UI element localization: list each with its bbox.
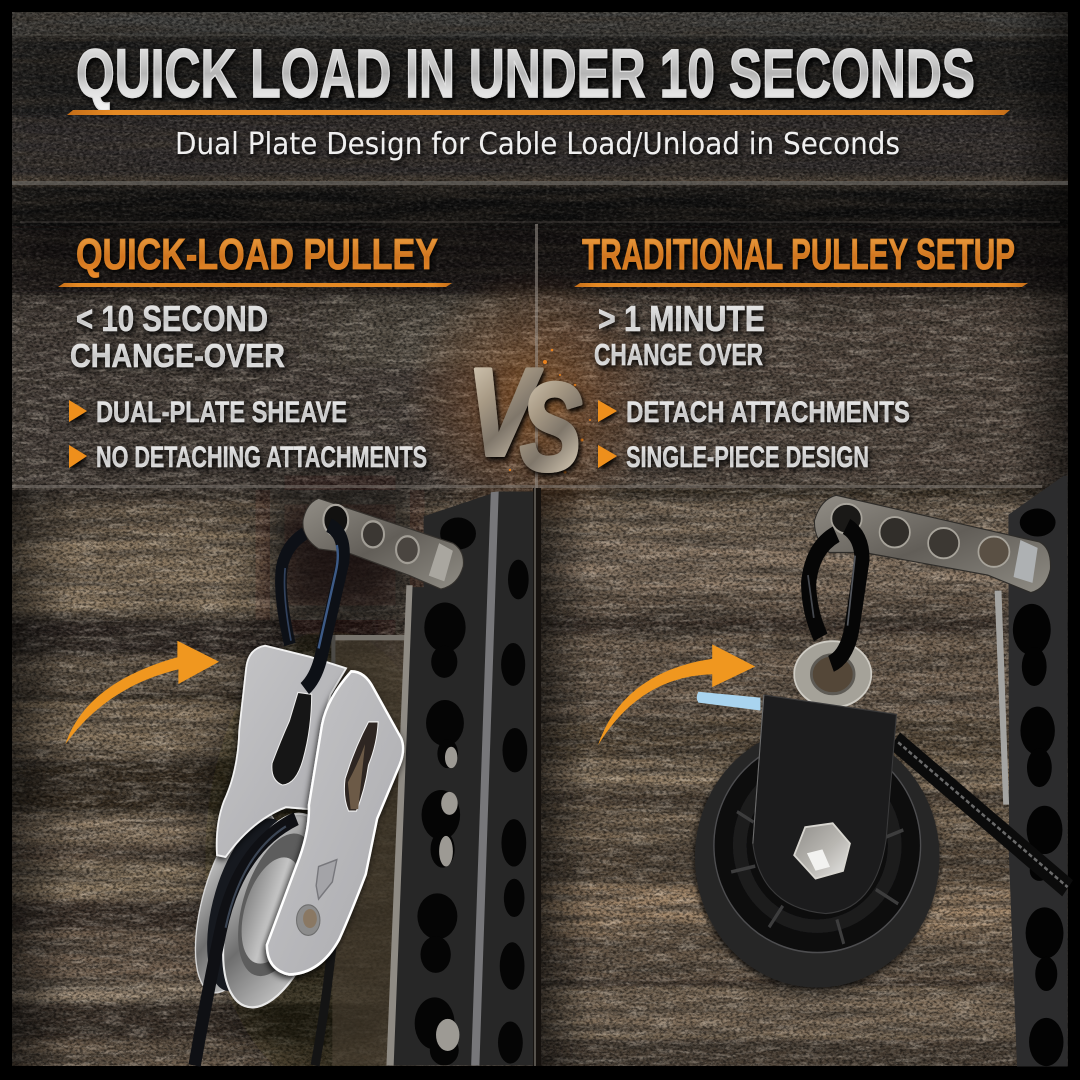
bullet: detach attachments: DETACH ATTACHMENTS — [626, 396, 910, 429]
steel bracket — [303, 498, 463, 589]
cable — [895, 740, 1068, 888]
photo: traditional pulley on rack — [598, 476, 1068, 1066]
sheave wheel — [695, 727, 940, 988]
blue pin — [697, 692, 760, 710]
change-over time: < 10 SECOND — [76, 298, 268, 339]
VS badge — [467, 344, 582, 497]
heading underline — [58, 283, 452, 287]
change-over time: CHANGE OVER — [594, 337, 763, 372]
logo diamond — [316, 860, 337, 899]
hex bolt — [794, 823, 850, 879]
sheave — [178, 798, 349, 1023]
panel: traditional pulley text — [574, 230, 1028, 474]
front plate — [267, 671, 403, 974]
bullet: no detaching attachments: NO DETACHING ATTACHMENTS — [96, 441, 427, 474]
rear frame rectangle — [331, 635, 406, 1066]
steel bracket — [814, 495, 1050, 593]
bullet: single-piece design: SINGLE-PIECE DESIGN — [626, 441, 869, 474]
subtitle: Dual Plate Design for Cable Load/Unload in Seconds — [175, 127, 900, 162]
change-over time: CHANGE-OVER — [70, 337, 285, 374]
VS badge: S — [520, 359, 582, 497]
main cable in groove — [195, 819, 296, 1066]
carabiner — [281, 525, 343, 689]
axle bolt — [297, 905, 320, 935]
rack upright — [386, 491, 533, 1066]
arrow — [598, 644, 755, 745]
bullet: dual-plate sheave: DUAL-PLATE SHEAVE — [96, 396, 347, 429]
VS badge: V — [467, 344, 543, 482]
change-over time — [70, 298, 285, 374]
panel: quick-load pulley text — [58, 230, 452, 474]
title underline — [67, 110, 1010, 115]
photo: quick-load pulley on rack — [65, 491, 533, 1066]
arrow — [65, 641, 219, 744]
bullet: no detaching attachments — [69, 441, 427, 474]
change-over time — [594, 298, 765, 372]
carabiner — [808, 526, 862, 664]
heading underline — [574, 283, 1028, 287]
bullet: single-piece design — [598, 441, 869, 474]
back plate — [217, 646, 346, 857]
rack upright — [995, 476, 1068, 1066]
black bracket plate — [753, 695, 896, 914]
change-over time: > 1 MINUTE — [598, 298, 765, 339]
second cable — [315, 943, 332, 1066]
heading: quick-load pulley: QUICK-LOAD PULLEY — [76, 230, 438, 279]
eye ring — [794, 641, 871, 707]
